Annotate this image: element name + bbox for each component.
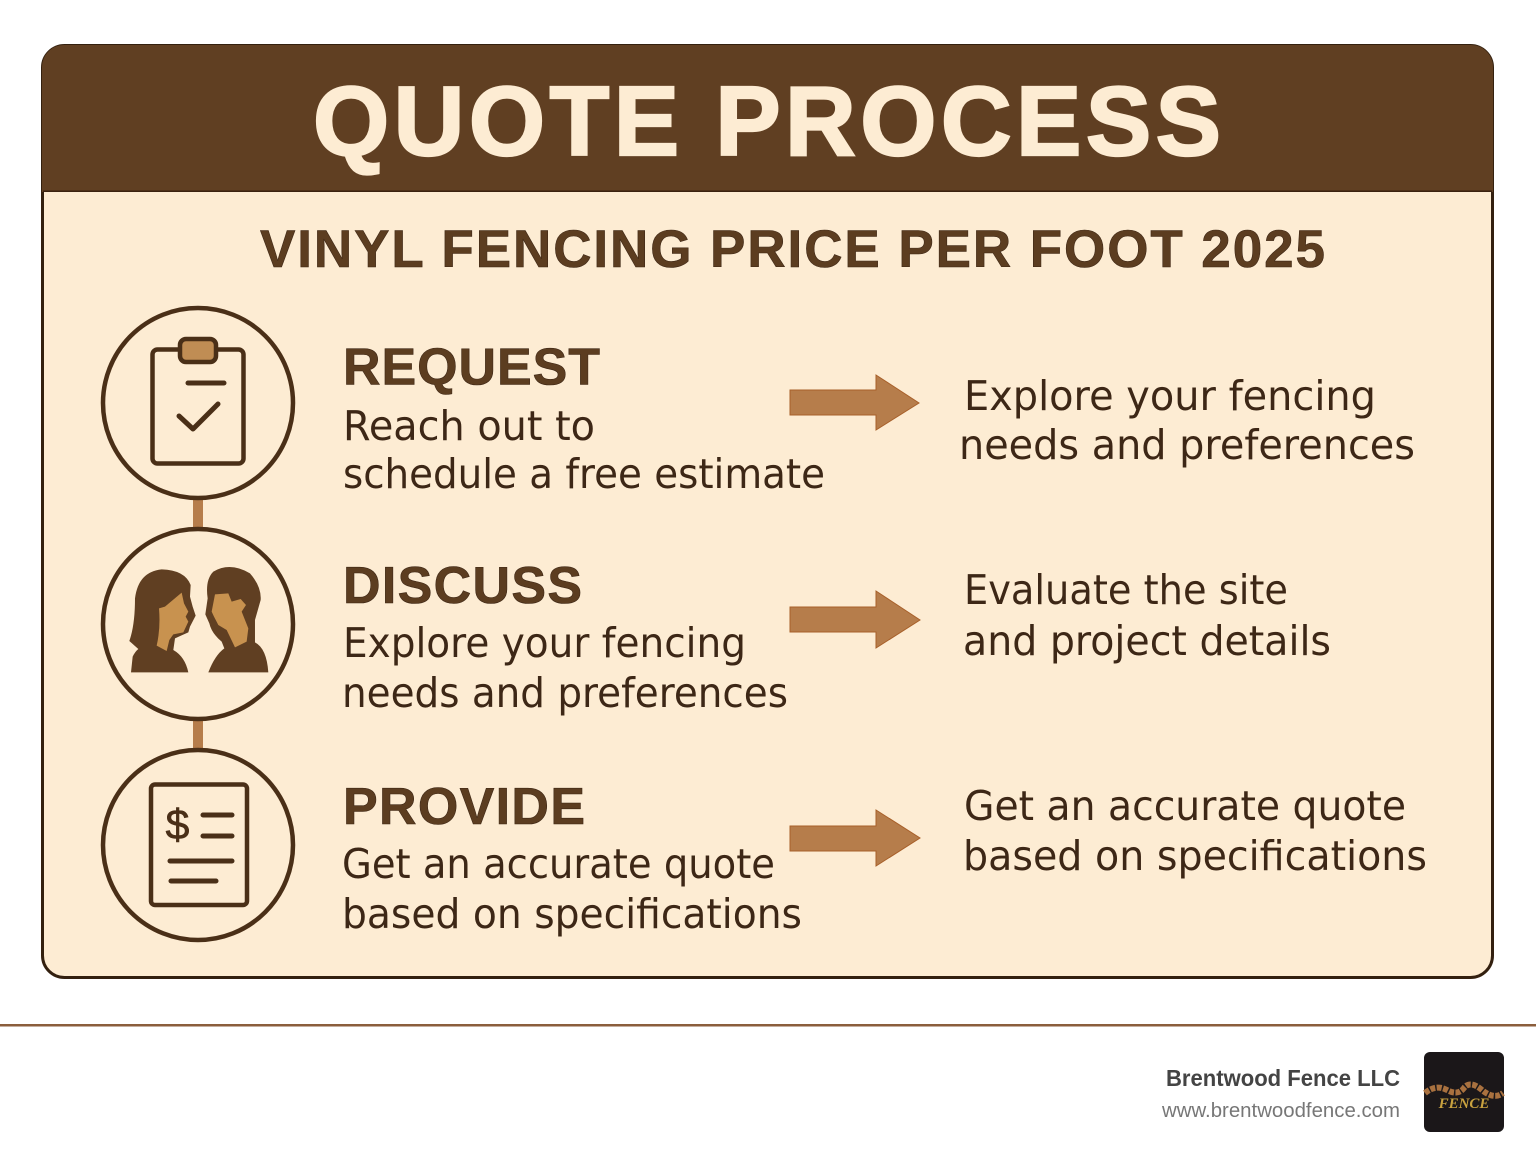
outcome: provide: Get an accurate quote <box>964 782 1406 830</box>
outcome: request <box>959 372 1415 469</box>
icon: company logo: FENCE <box>1438 1096 1489 1112</box>
step: request <box>343 338 825 498</box>
outcome: provide: based on specifications <box>963 832 1427 880</box>
step: provide: Get an accurate quote <box>342 840 775 888</box>
step: provide: PROVIDE <box>343 778 585 836</box>
step: request: schedule a free estimate <box>343 450 825 498</box>
step: discuss: Explore your fencing <box>343 619 746 667</box>
arrow: provide <box>790 810 920 866</box>
outcome: request: Explore your fencing <box>964 372 1376 420</box>
outcome: request: needs and preferences <box>959 421 1415 469</box>
outcome: provide <box>963 782 1427 880</box>
panel: quote process card <box>42 45 1493 978</box>
outcome: discuss: and project details <box>963 617 1331 665</box>
icon: priced quote document: $ <box>166 801 190 849</box>
connector: steps 1 to 2 <box>193 497 203 528</box>
step: discuss: DISCUSS <box>343 557 582 615</box>
step: request: REQUEST <box>343 338 600 396</box>
header band <box>42 45 1493 192</box>
subtitle: VINYL FENCING PRICE PER FOOT 2025 <box>260 220 1325 279</box>
step: discuss <box>342 557 788 717</box>
footer divider <box>0 1024 1536 1026</box>
step: request: Reach out to <box>343 402 595 450</box>
title: QUOTE PROCESS <box>313 66 1221 176</box>
outcome: discuss: Evaluate the site <box>964 566 1288 614</box>
icon: priced quote document <box>103 750 293 940</box>
step: provide: based on specifications <box>342 890 802 938</box>
icon: two people talking <box>103 529 293 719</box>
arrow: request <box>790 375 919 430</box>
icon: company logo <box>1424 1052 1504 1132</box>
connector: steps 2 to 3 <box>193 719 203 749</box>
icon: clipboard <box>103 308 293 498</box>
footer company name: Brentwood Fence LLC <box>1166 1065 1400 1091</box>
outcome: discuss <box>963 566 1331 665</box>
footer website: www.brentwoodfence.com <box>1161 1100 1400 1122</box>
arrow: discuss <box>790 591 920 648</box>
step: discuss: needs and preferences <box>342 669 788 717</box>
step: provide <box>342 778 802 938</box>
